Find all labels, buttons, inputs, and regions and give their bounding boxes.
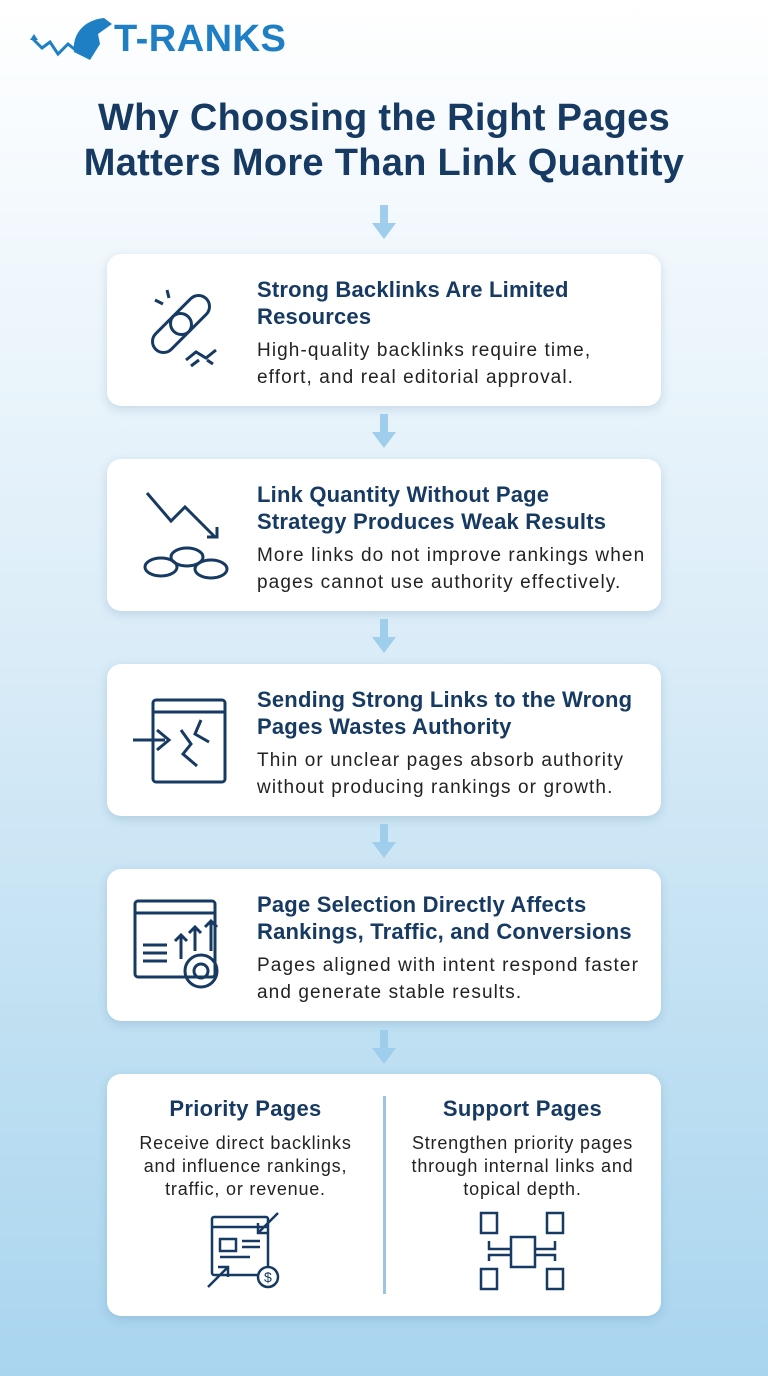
card 1: Strong Backlinks Are Limited [257,277,569,302]
column: support pages: Strengthen priority pages [412,1133,633,1153]
card 1: High-quality backlinks require time, [257,340,591,361]
column: support pages: topical depth. [463,1179,582,1199]
logo: T-RANKS [114,18,286,60]
arrow [372,824,396,858]
card 2: Strategy Produces Weak Results [257,509,606,534]
column: priority pages [139,1096,352,1288]
column: support pages: through internal links and [412,1156,633,1176]
card 3: Sending Strong Links to the Wrong [257,687,632,712]
arrow [372,619,396,653]
icon: page with dollar: $ [264,1269,272,1285]
icon: page with dollar [207,1212,280,1288]
column: support pages: Support Pages [443,1096,602,1121]
card 4: Rankings, Traffic, and Conversions [257,919,632,944]
card 1: effort, and real editorial approval. [257,367,574,388]
card 4 [107,869,661,1021]
title: Matters More Than Link Quantity [84,142,684,184]
card 3 [107,664,661,816]
card 4: Page Selection Directly Affects [257,892,586,917]
column: priority pages: Priority Pages [169,1096,322,1121]
column: support pages [412,1096,633,1290]
card 2: More links do not improve rankings when [257,545,645,566]
column: priority pages: Receive direct backlinks [139,1133,352,1153]
card 5: priority vs support [107,1074,661,1316]
card 1: Resources [257,304,371,329]
arrow [372,1030,396,1064]
icon: broken chain with down arrow [144,492,228,580]
icon: linked documents [480,1212,564,1290]
card 2: pages cannot use authority effectively. [257,572,621,593]
card 3: Thin or unclear pages absorb authority [257,750,624,771]
card 1 [107,254,661,406]
icon: page with target and arrows [134,900,218,988]
card 2: Link Quantity Without Page [257,482,549,507]
arrow [372,205,396,239]
card 3: Pages Wastes Authority [257,714,512,739]
card 4: and generate stable results. [257,982,522,1003]
icon: chain handshake [151,290,217,368]
icon: cracked page with arrow [133,698,226,784]
card 4: Pages aligned with intent respond faster [257,955,639,976]
title: Why Choosing the Right Pages [98,97,670,139]
card 2 [107,459,661,611]
divider [383,1096,386,1294]
card 3: without producing rankings or growth. [257,777,613,798]
logo [30,18,286,60]
column: priority pages: and influence rankings, [144,1156,347,1176]
column: priority pages: traffic, or revenue. [165,1179,326,1199]
title [84,97,684,184]
arrow [372,414,396,448]
